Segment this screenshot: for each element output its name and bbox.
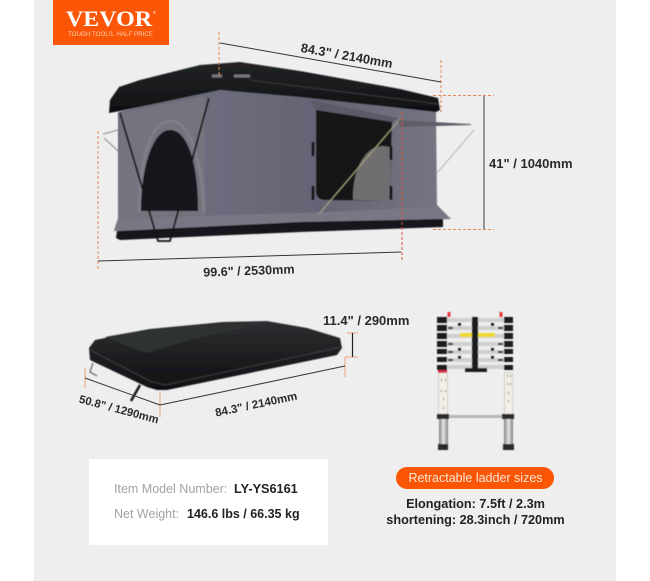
- tent front window: [310, 100, 400, 214]
- ladder lower tubes: [439, 419, 448, 444]
- dimension: box width: [78, 368, 160, 427]
- closed rooftop box illustration: [89, 321, 342, 401]
- ladder sizes text: shortening: 28.3inch / 720mm: [386, 513, 565, 527]
- tent side panel: [118, 96, 205, 218]
- tent grey fabric body: [114, 88, 451, 231]
- dimension: box height: [323, 313, 409, 357]
- ladder sizes text: [386, 497, 565, 527]
- tent lower skirt: [114, 207, 451, 231]
- dimension: tent width: 99.6" / 2530mm: [203, 262, 295, 280]
- VEVOR logo: ®: [153, 10, 156, 15]
- dimension: box length: [160, 357, 345, 420]
- model number value: LY-YS6161: [234, 482, 298, 496]
- dimension: box width: 50.8" / 1290mm: [78, 394, 160, 427]
- tent window awning with strut: [398, 120, 472, 127]
- ladder lower rung: [449, 415, 503, 418]
- yellow label: [460, 333, 495, 337]
- net weight label: Net Weight:: [114, 507, 179, 521]
- VEVOR logo: TOUGH TOOLS, HALF PRICE: [68, 32, 153, 38]
- open rooftop tent illustration: [103, 62, 474, 241]
- dimension: tent height: 41" / 1040mm: [489, 156, 572, 171]
- dimension: roof length: [219, 32, 441, 112]
- ladder sizes text: Elongation: 7.5ft / 2.3m: [406, 497, 545, 511]
- ladder hinge blocks: [437, 317, 513, 372]
- tent side door: [139, 121, 204, 213]
- telescopic ladder illustration: [437, 312, 514, 450]
- ladder collars and feet: [437, 414, 514, 450]
- ladder size badge: [396, 467, 554, 489]
- model and weight card: [89, 459, 328, 545]
- tent black strap: [120, 98, 209, 241]
- tent left awning strut: [103, 130, 118, 151]
- VEVOR logo: VEVOR: [66, 6, 153, 31]
- ladder rungs: [446, 318, 504, 369]
- tent roof highlights: [212, 74, 250, 78]
- dimension: tent width: [98, 112, 402, 280]
- ladder upper legs: [438, 373, 512, 414]
- dimension: tent height: [433, 96, 572, 230]
- VEVOR logo: [53, 0, 169, 45]
- dimension: box length: 84.3" / 2140mm: [214, 391, 298, 420]
- tent base tray: [116, 219, 443, 240]
- model number label: Item Model Number:: [114, 482, 227, 496]
- net weight value: 146.6 lbs / 66.35 kg: [187, 507, 300, 521]
- ladder red caps: [448, 312, 502, 317]
- dimension: roof length: 84.3" / 2140mm: [300, 40, 394, 71]
- ladder size badge: Retractable ladder sizes: [408, 471, 543, 485]
- ladder leg rivets: [441, 376, 511, 408]
- dimension: box height: 11.4" / 290mm: [323, 313, 409, 328]
- tent roof shell: [109, 62, 440, 113]
